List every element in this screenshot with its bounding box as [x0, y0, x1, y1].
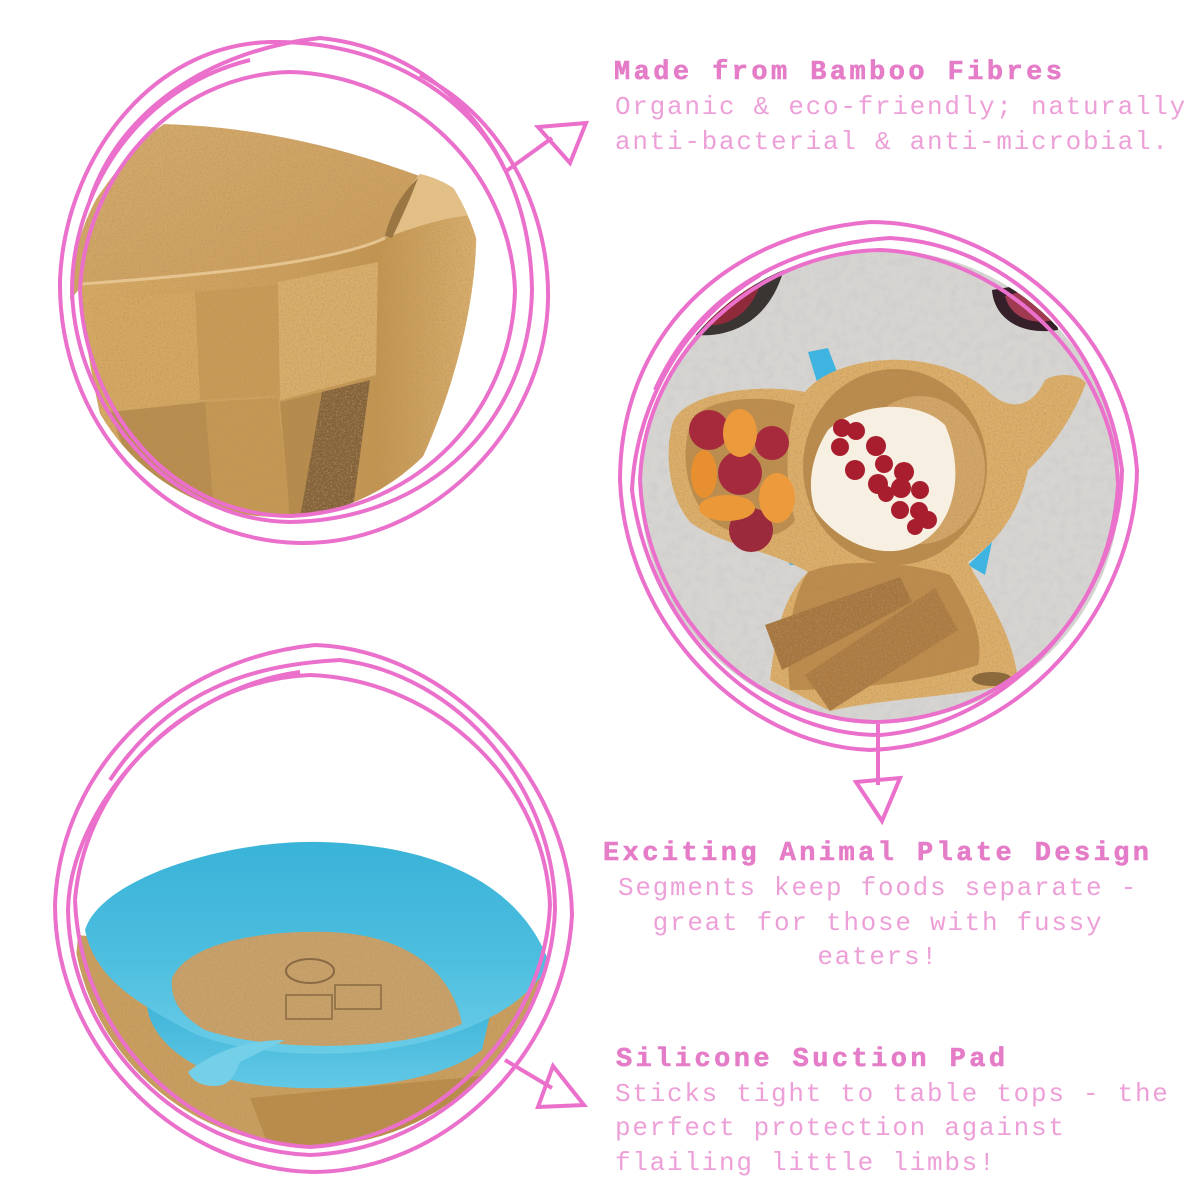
- text: bamboo description: anti-bacterial & anti-microbial.: [615, 127, 1170, 157]
- icon: arrow to suction heading: [505, 1060, 584, 1107]
- bowl rim: [385, 174, 476, 238]
- blue plate: [85, 842, 550, 1054]
- blue suction tabs: [808, 348, 836, 382]
- bamboo table: [60, 935, 560, 1150]
- text: bamboo description: Organic & eco-friendly; naturally: [615, 92, 1187, 122]
- icon: arrow to plate heading: [856, 724, 900, 821]
- bamboo disc: [172, 932, 462, 1046]
- lower segment: [788, 563, 979, 690]
- panel: bamboo bowl photo: [60, 38, 548, 543]
- text: suction description: flailing little limbs!: [615, 1148, 996, 1178]
- redcurrants: [831, 419, 937, 535]
- fig top right: [992, 287, 1058, 332]
- text: suction description: perfect protection against: [615, 1113, 1066, 1143]
- suction cup ring: [147, 1002, 490, 1088]
- left segment: [686, 399, 795, 536]
- text: plate description: eaters!: [817, 942, 939, 972]
- oranges and raspberries: [689, 409, 795, 552]
- pink sketch rings: suction: [55, 645, 572, 1172]
- logo on disc: [286, 959, 334, 983]
- elephant plate body: [669, 360, 1086, 711]
- panel: elephant plate photo: [620, 222, 1140, 750]
- bowl interior: [70, 124, 425, 300]
- round segment: [803, 369, 987, 565]
- panel: suction pad photo: [55, 645, 572, 1172]
- suction tab: [188, 1040, 285, 1086]
- yoghurt: [811, 407, 955, 551]
- pink sketch rings: plate: [620, 222, 1137, 750]
- heading: Exciting Animal Plate Design: Exciting Animal Plate Design: [603, 839, 1152, 869]
- text: plate description: Segments keep foods separate -: [618, 873, 1138, 903]
- text: plate description: great for those with fussy: [653, 908, 1103, 938]
- heading: Silicone Suction Pad: Silicone Suction Pad: [616, 1045, 1008, 1075]
- icon: arrow to bamboo heading: [505, 123, 586, 172]
- text: suction description: Sticks tight to table tops - the: [615, 1079, 1170, 1109]
- small dish top left: [696, 270, 784, 336]
- wall bamboo blocks: [90, 292, 200, 412]
- toast: [765, 577, 958, 711]
- heading: Made from Bamboo Fibres: Made from Bamboo Fibres: [614, 58, 1065, 88]
- bowl outer wall: [80, 174, 476, 525]
- pink sketch rings: bowl: [60, 38, 548, 543]
